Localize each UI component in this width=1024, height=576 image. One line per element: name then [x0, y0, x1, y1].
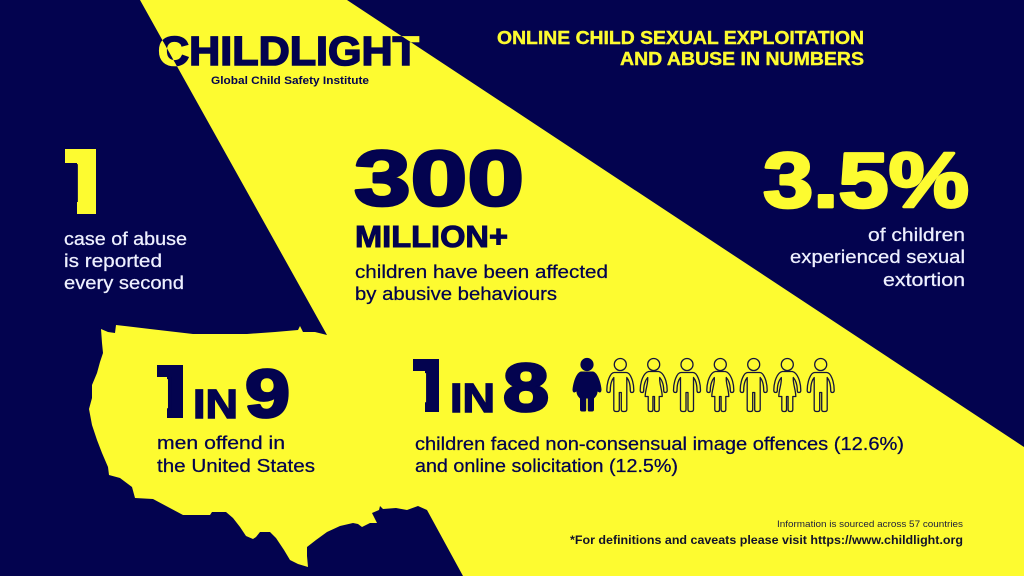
description: experienced sexual	[790, 246, 965, 267]
source note: Information is sourced across 57 countries	[777, 519, 963, 529]
stat: 1 in 9	[157, 365, 314, 472]
description: children have been affected	[355, 261, 608, 282]
footer notes	[570, 519, 963, 547]
unit: MILLION+	[355, 219, 508, 254]
stat: 300 million	[354, 134, 608, 304]
icon: outline person 6	[740, 358, 767, 412]
definitions note: *For definitions and caveats please visit https://www.childlight.org	[570, 533, 963, 547]
icon: outline person 3	[640, 358, 667, 412]
logo tagline: Global Child Safety Institute	[211, 75, 369, 87]
description: case of abuse	[64, 228, 187, 249]
logo wordmark on navy: CHILDLIGHT	[158, 28, 419, 74]
ratio: 8	[503, 350, 549, 426]
description: children faced non-consensual image offences (12.6%)	[415, 433, 904, 454]
icon: outline person 5	[707, 358, 734, 412]
icon: outline person 2	[607, 358, 634, 412]
description: every second	[64, 272, 184, 293]
ratio: IN	[450, 375, 495, 421]
description: and online solicitation (12.5%)	[415, 455, 678, 476]
number: 1	[50, 110, 122, 240]
title	[497, 28, 864, 69]
ratio: 1	[407, 331, 457, 433]
number: 3.5%	[763, 136, 969, 224]
icon: outline person 8	[807, 358, 834, 412]
description: by abusive behaviours	[355, 283, 557, 304]
description	[415, 433, 904, 476]
icon: outline person 7	[774, 358, 801, 412]
icon: filled person	[572, 358, 602, 412]
ratio: 9	[245, 356, 290, 432]
ratio: IN	[193, 381, 238, 427]
description	[790, 224, 965, 290]
number	[65, 149, 96, 214]
description: extortion	[883, 269, 965, 290]
title: AND ABUSE IN NUMBERS	[620, 49, 864, 69]
stat: 1 in 8	[413, 358, 903, 476]
description	[64, 228, 187, 293]
icon: outline person 4	[674, 358, 700, 412]
description: of children	[868, 224, 965, 245]
stat: 3.5 percent	[763, 136, 969, 290]
number: 300	[354, 134, 524, 222]
stat: 1 case of abuse	[64, 149, 186, 294]
ratio	[413, 359, 548, 413]
description: the United States	[157, 455, 315, 476]
description: is reported	[64, 250, 162, 271]
ratio	[157, 365, 289, 419]
title: ONLINE CHILD SEXUAL EXPLOITATION	[497, 28, 864, 48]
description: men offend in	[157, 432, 285, 453]
description	[157, 432, 315, 476]
description	[355, 261, 608, 304]
ratio: 1	[147, 337, 201, 439]
logo wordmark on beam: CHILDLIGHT	[158, 28, 419, 74]
icon row: one in eight people	[572, 358, 834, 412]
logo	[158, 36, 420, 86]
